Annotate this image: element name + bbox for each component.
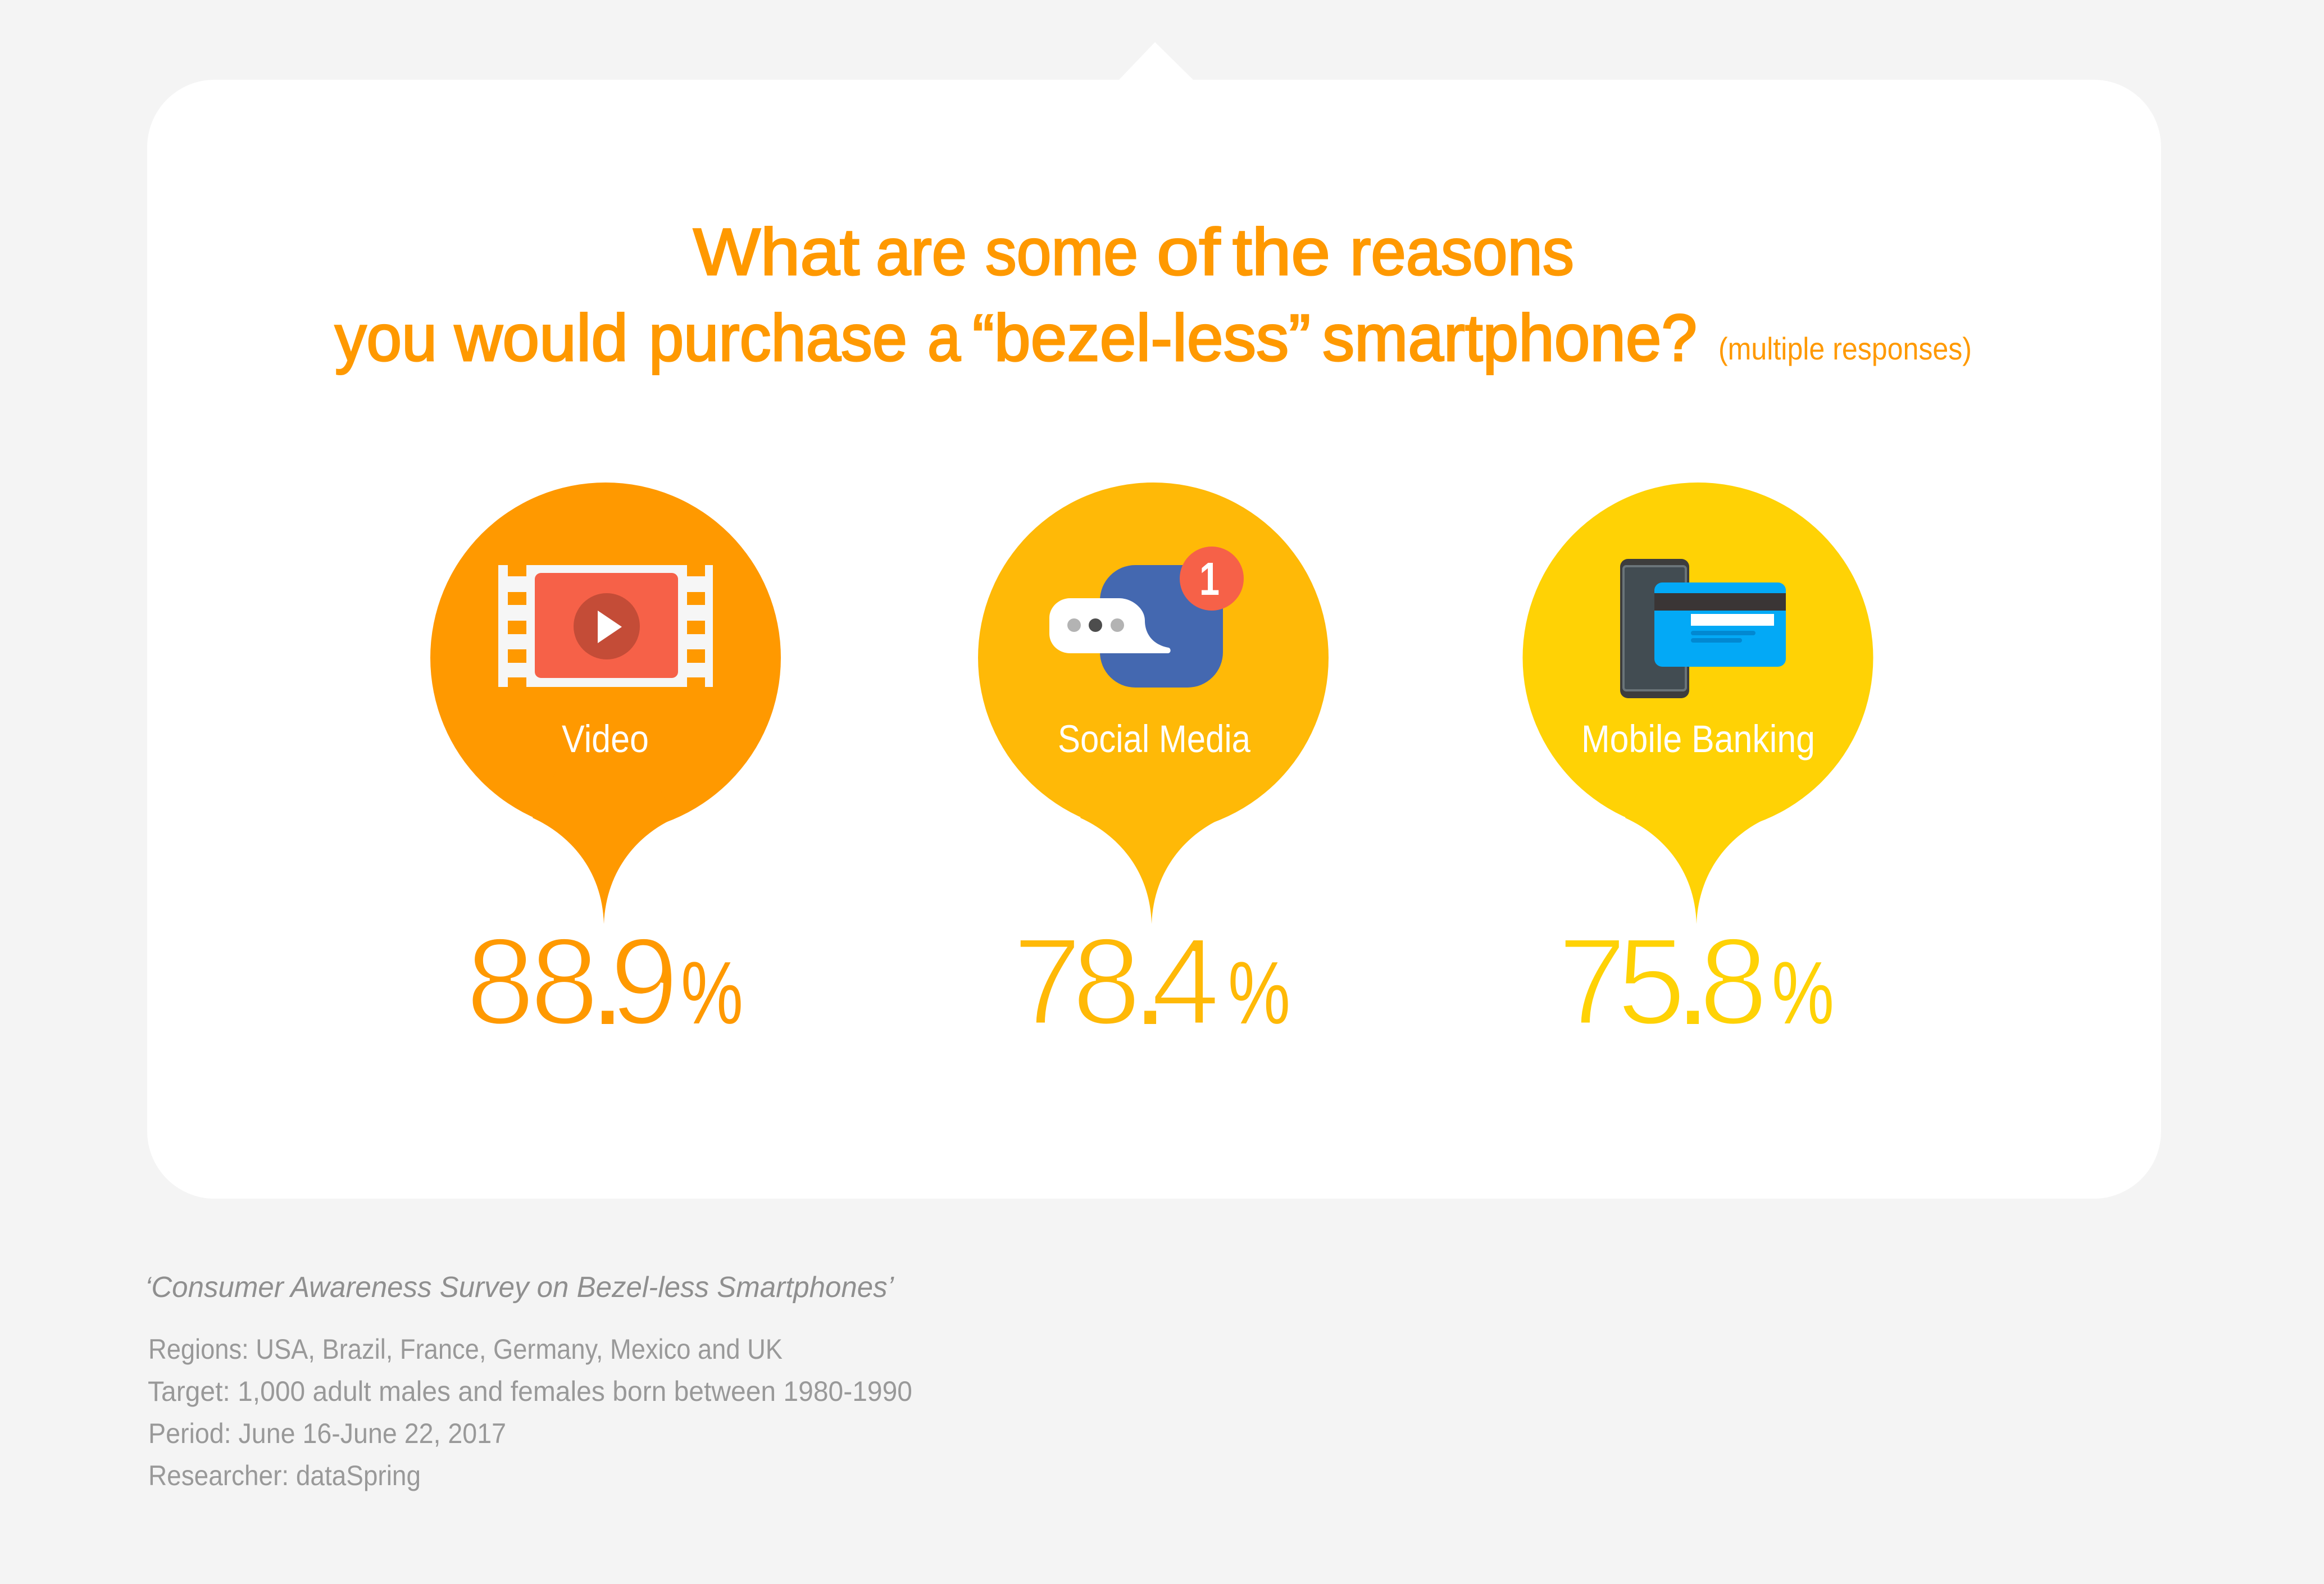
title xyxy=(335,215,1697,375)
title: the xyxy=(1233,215,1330,289)
pin: mobile banking xyxy=(1522,483,1873,924)
panel: white speech bubble xyxy=(147,42,2161,1199)
value: mobile banking: 8 xyxy=(1699,912,1768,1050)
value: social media: . xyxy=(1133,912,1167,1050)
value: video: 9 xyxy=(610,912,679,1050)
value: video: % xyxy=(681,944,743,1043)
value: video: . xyxy=(590,912,625,1050)
note: multiple responses: (multiple responses) xyxy=(1718,331,1972,366)
title: a xyxy=(927,301,961,375)
title: purchase xyxy=(649,301,907,375)
panel: social media xyxy=(978,483,1329,1050)
label: video: Video xyxy=(562,717,649,761)
panel: video xyxy=(430,483,781,1050)
title: “bezel-less” xyxy=(972,301,1311,375)
pin: social media xyxy=(978,483,1329,924)
title: reasons xyxy=(1350,215,1574,289)
survey title: ‘Consumer Awareness Survey on Bezel-less Smartphones’ xyxy=(145,1271,894,1304)
value: social media: 78 xyxy=(1013,912,1141,1050)
value: social media xyxy=(1013,912,1290,1050)
value: mobile banking: % xyxy=(1772,944,1834,1043)
survey details: Researcher: dataSpring xyxy=(148,1460,421,1491)
value: video: 88 xyxy=(466,912,599,1050)
survey details: Regions: USA, Brazil, France, Germany, Mexico and UK xyxy=(148,1333,783,1365)
title: of xyxy=(1157,215,1220,289)
title: would xyxy=(454,301,628,375)
value: mobile banking: . xyxy=(1676,912,1710,1050)
value: social media: % xyxy=(1228,944,1290,1043)
value: mobile banking: 75 xyxy=(1558,912,1686,1050)
title: some xyxy=(985,215,1138,289)
title: What xyxy=(693,215,859,289)
panel: mobile banking xyxy=(1522,483,1873,1050)
survey details xyxy=(148,1333,912,1491)
value: video xyxy=(466,912,743,1050)
icon: chat notification xyxy=(1049,547,1244,688)
label: social media: Social Media xyxy=(1058,717,1251,761)
value: mobile banking xyxy=(1558,912,1834,1050)
title: smartphone? xyxy=(1322,301,1697,375)
survey details: Target: 1,000 adult males and females born between 1980-1990 xyxy=(148,1376,912,1407)
title: you xyxy=(335,301,437,375)
icon: film strip xyxy=(498,565,713,687)
label: mobile banking: Mobile Banking xyxy=(1581,717,1815,761)
icon: phone and card xyxy=(1620,559,1786,698)
survey details: Period: June 16-June 22, 2017 xyxy=(148,1418,506,1449)
value: social media: 4 xyxy=(1151,912,1220,1050)
title: are xyxy=(876,215,967,289)
icon: chat notification: 1 xyxy=(1199,553,1220,605)
pin: video xyxy=(430,483,781,924)
